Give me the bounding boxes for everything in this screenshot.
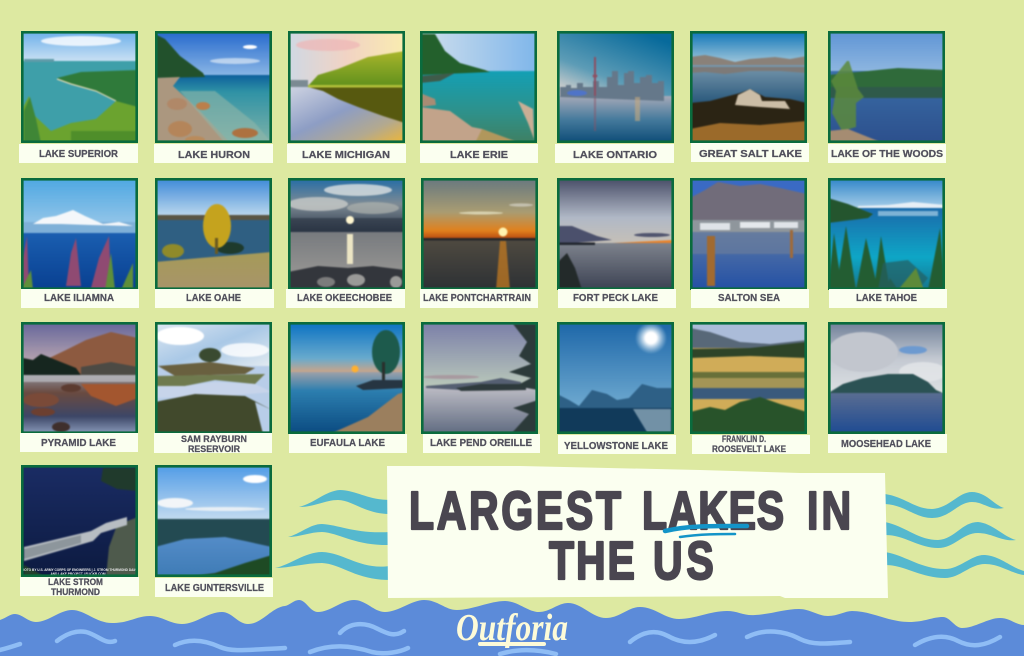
photo: Lake Oahe [155,178,272,289]
label: Sam Rayburn Reservoir [154,433,272,455]
photo: Lake Superior [21,31,138,143]
card: Lake Huron [154,31,273,163]
card: Lake of the Woods [828,31,946,163]
card: Lake Ontario [555,31,674,163]
label: Lake Superior: LAKE SUPERIOR [39,148,118,160]
label: Sam Rayburn Reservoir: RESERVOIR [188,444,240,455]
label: Great Salt Lake: GREAT SALT LAKE [699,148,802,160]
label: Lake Strom Thurmond [20,577,139,598]
label: Franklin D. Roosevelt Lake [692,434,810,454]
photo: Eufaula Lake [288,322,405,434]
photo: Moosehead Lake [828,322,945,434]
label: Lake Iliamna: LAKE ILIAMNA [44,292,114,304]
photo: Salton Sea [690,178,807,290]
card: Lake Guntersville [155,465,273,597]
card: Franklin D. Roosevelt Lake [690,322,810,454]
label: Franklin D. Roosevelt Lake: FRANKLIN D. [722,434,766,444]
label: Lake Huron: LAKE HURON [178,149,250,161]
label: Lake Pontchartrain: LAKE PONTCHARTRAIN [423,292,531,304]
label: Pyramid Lake: PYRAMID LAKE [41,437,116,449]
water band [0,600,1024,656]
card: Salton Sea [690,178,809,308]
logo: Outforia: Outforia [456,607,568,649]
card: Lake Okeechobee [286,178,405,308]
photo: Sam Rayburn Reservoir [155,322,272,433]
label: Sam Rayburn Reservoir: SAM RAYBURN [181,434,247,445]
photo: Lake Huron [155,31,272,143]
card: Lake Tahoe [828,178,947,308]
photo: Lake Okeechobee [288,178,405,289]
card: Sam Rayburn Reservoir [154,322,272,455]
card: Moosehead Lake [828,322,947,453]
photo: Lake Michigan [288,31,405,143]
photo: Lake Pontchartrain [421,178,538,289]
photo: Lake Iliamna [21,178,138,289]
photo: Yellowstone Lake [557,322,674,434]
photo: Lake Erie [420,31,537,143]
photo: Lake Pend Oreille [421,322,538,434]
label: Lake Oahe: LAKE OAHE [186,292,241,304]
card: Lake Michigan [287,31,406,163]
label: Eufaula Lake: EUFAULA LAKE [310,437,385,449]
card: Lake Pend Oreille [421,322,540,453]
waves: right of title [885,492,1024,578]
waves: left of title [275,490,390,580]
heading: Largest Lakes in the US: THE [549,532,635,591]
photo: Lake Ontario [557,31,674,143]
brush underline: Lakes [665,526,747,537]
label: Lake Ontario: LAKE ONTARIO [573,149,657,161]
photo: Franklin D. Roosevelt Lake [690,322,807,434]
heading: Largest Lakes in the US: US [653,532,714,591]
label: Franklin D. Roosevelt Lake: ROOSEVELT LAKE [712,444,786,454]
water ripples [0,624,1000,654]
card: Fort Peck Lake [557,178,676,308]
label: Salton Sea: SALTON SEA [718,292,780,304]
card: Lake Strom Thurmond [20,465,139,598]
photo: Fort Peck Lake [557,178,674,290]
card: Eufaula Lake [288,322,407,453]
card: Great Salt Lake [690,31,809,162]
card: Lake Erie [420,31,538,163]
title panel [387,466,888,598]
heading: Largest Lakes in the US: IN [807,482,851,541]
card: Lake Iliamna [21,178,139,308]
card: Lake Pontchartrain [420,178,538,308]
card: Yellowstone Lake [557,322,676,454]
heading: Largest Lakes in the US: LARGEST [409,482,621,541]
photo: Lake Tahoe [828,178,945,290]
card: Lake Oahe [155,178,274,308]
photo: Great Salt Lake [690,31,807,143]
label: Moosehead Lake: MOOSEHEAD LAKE [841,438,931,450]
heading: Largest Lakes in the US [409,482,851,591]
photo: Lake Strom Thurmond: AND LAKE PROJECT | FLICKR.COM [50,572,106,576]
label: Lake Strom Thurmond: THURMOND [51,587,100,598]
label: Yellowstone Lake: YELLOWSTONE LAKE [564,440,668,452]
label: Lake Pend Oreille: LAKE PEND OREILLE [430,437,532,449]
card: Pyramid Lake [20,322,138,452]
label: Lake Guntersville: LAKE GUNTERSVILLE [165,582,264,594]
label: Fort Peck Lake: FORT PECK LAKE [573,292,658,304]
heading: Largest Lakes in the US: LAKES [642,482,784,541]
label: Lake Erie: LAKE ERIE [450,149,508,161]
photo: Lake of the Woods [828,31,945,143]
photo: Lake Strom Thurmond [20,465,138,577]
card: Lake Superior [19,31,138,163]
label: Lake Strom Thurmond: LAKE STROM [48,577,103,588]
label: Lake Michigan: LAKE MICHIGAN [302,149,390,161]
label: Lake of the Woods: LAKE OF THE WOODS [831,148,943,160]
photo: Pyramid Lake [21,322,138,433]
photo: Lake Guntersville [155,465,272,577]
label: Lake Tahoe: LAKE TAHOE [856,292,917,304]
label: Lake Okeechobee: LAKE OKEECHOBEE [297,292,392,304]
photo: Lake Strom Thurmond: PHOTO BY U.S. ARMY CORPS OF ENGINEERS | J. STROM THURMOND DAM [20,568,136,572]
